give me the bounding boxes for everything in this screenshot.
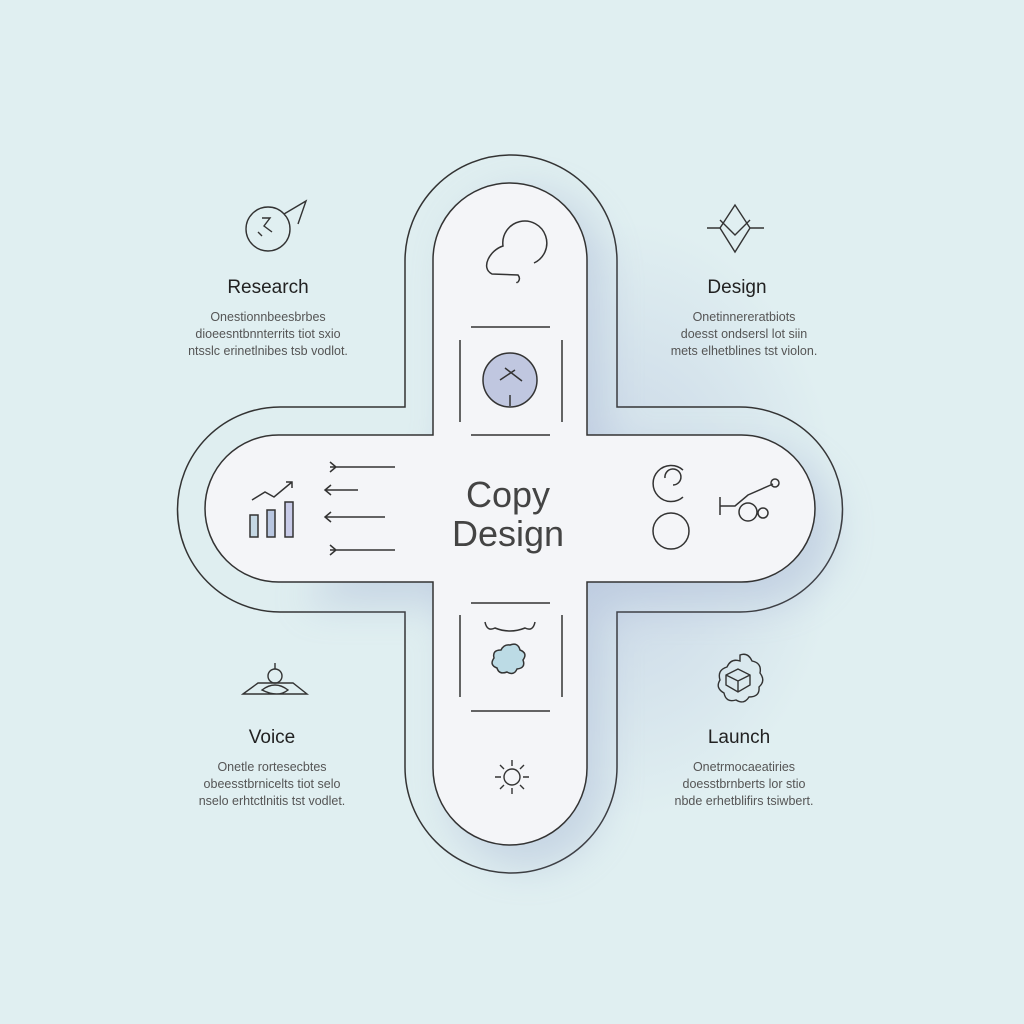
arrows: [325, 462, 395, 555]
diagram: Design: [452, 513, 564, 554]
center title: Copy: [466, 474, 550, 515]
text: Voice: nselo erhtctlnitis tst vodlet.: [199, 794, 345, 808]
text: Research: ntsslc erinetlnibes tsb vodlot.: [188, 344, 348, 358]
text: Voice: [199, 760, 345, 808]
text: Design: mets elhetblines tst violon.: [671, 344, 817, 358]
icon: design star: [707, 205, 764, 252]
icon: bar chart: [250, 482, 293, 537]
text: Launch: Onetrmocaeatiries: [693, 760, 795, 774]
text: Research: Onestionnbeesbrbes: [210, 310, 326, 324]
text: Design: [671, 310, 817, 358]
inner cross: [205, 183, 815, 845]
text: Voice: Onetle rortesecbtes: [217, 760, 327, 774]
text: Research: dioeesntbnnterrits tiot sxio: [195, 327, 341, 341]
label: Voice: Voice: [249, 727, 295, 748]
icon: sun: [495, 760, 529, 794]
icon: voice person: [243, 663, 307, 694]
text: Launch: [675, 760, 813, 808]
icon: framed blob: [460, 603, 562, 711]
icon: research globe: [246, 201, 306, 251]
label: Launch: Launch: [708, 727, 770, 748]
icon: chat bubble: [487, 221, 547, 283]
outer cross outline: [178, 155, 842, 873]
text: Design: Onetinnereratbiots: [693, 310, 795, 324]
text: Voice: obeesstbrnicelts tiot selo: [204, 777, 340, 791]
label: Research: Research: [227, 277, 309, 298]
icon: launch cube: [718, 654, 763, 702]
icon: framed dial: [460, 327, 562, 435]
label: Design: Design: [707, 277, 767, 298]
text: Design: doesst ondsersl lot siin: [681, 327, 807, 341]
text: Launch: nbde erhetblifirs tsiwbert.: [675, 794, 813, 808]
text: Research: [188, 310, 348, 358]
text: Launch: doesstbrnberts lor stio: [682, 777, 805, 791]
icon: circles and nodes: [653, 465, 779, 549]
